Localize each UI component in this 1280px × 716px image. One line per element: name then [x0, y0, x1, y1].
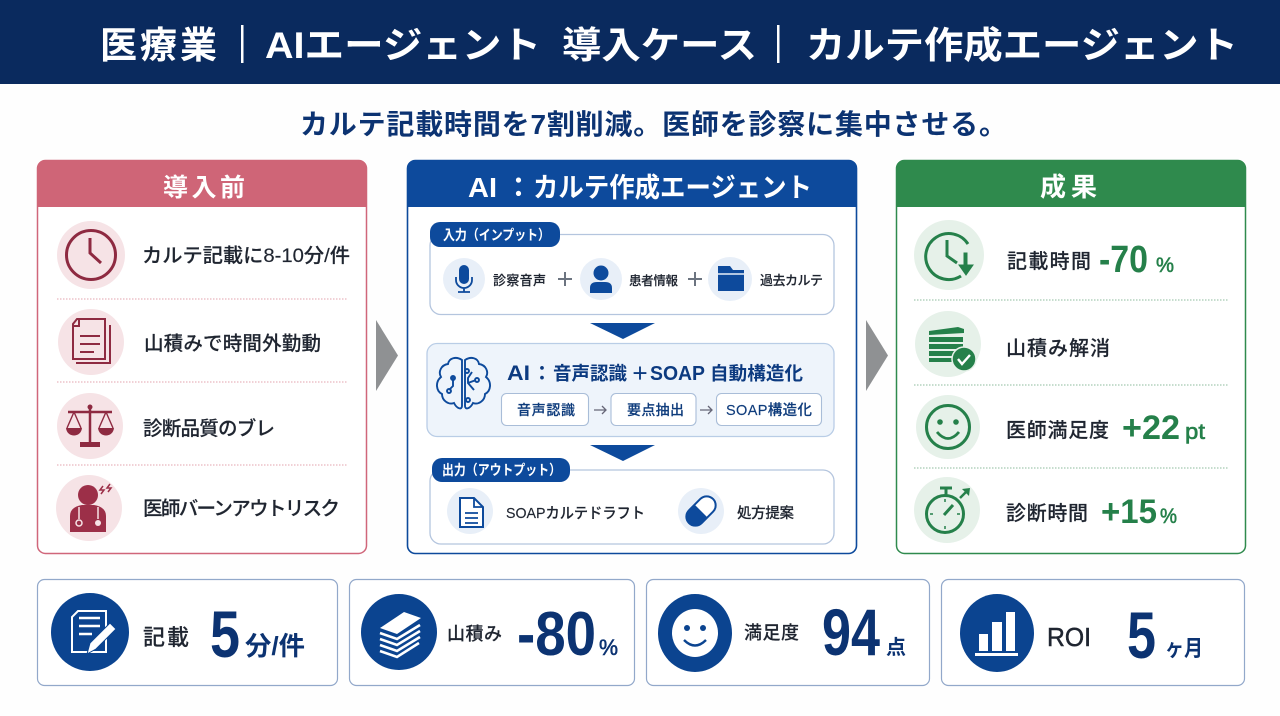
panel: results — [896, 160, 1246, 554]
icon: microphone — [443, 258, 485, 300]
panel heading: agent: カルテ作成エージェント — [533, 173, 812, 203]
metric: diagnosis time: +15 — [1101, 493, 1157, 531]
input pill: 入力（インプット） — [443, 227, 550, 243]
KPI card: satisfaction — [646, 580, 930, 686]
label: 記載 — [143, 625, 189, 650]
heading: AI process: 音声認識 — [553, 363, 627, 384]
KPI card: ROI — [942, 580, 1244, 686]
KPI card: backlog — [350, 580, 634, 686]
panel heading: results: 成果 — [1040, 172, 1097, 202]
icon: smile — [658, 594, 732, 672]
value: ヶ月 — [1165, 636, 1203, 661]
arrow: step one to two — [594, 406, 606, 414]
value: 5 — [210, 597, 240, 671]
heading: AI process: AI — [507, 362, 530, 385]
step: key point extraction — [611, 394, 696, 426]
metric: doctor satisfaction: 医師満足度 — [1006, 419, 1109, 442]
step: speech recognition: 音声認識 — [517, 402, 575, 418]
metric: documentation time — [1007, 239, 1174, 281]
heading: AI process: ： — [532, 363, 552, 385]
panel heading: before: 導入前 — [163, 174, 245, 202]
plus sign — [558, 272, 572, 286]
text: past records: 過去カルテ — [760, 273, 823, 288]
icon: burnt-out doctor — [56, 475, 122, 541]
panel heading: results — [896, 160, 1246, 207]
text: SOAP draft: SOAPカルテドラフト — [506, 505, 645, 522]
value: 点 — [886, 636, 906, 659]
icon: document — [447, 488, 493, 534]
step: key point extraction: 要点抽出 — [627, 402, 684, 418]
icon: note and pen — [51, 593, 129, 671]
heading: AI process — [507, 362, 803, 385]
output pill — [432, 458, 570, 482]
arrow: AI to output — [590, 445, 655, 461]
heading: AI process: ＋ — [631, 364, 649, 384]
metric: documentation time: -70 — [1099, 239, 1148, 281]
step: speech recognition — [502, 394, 588, 426]
text: diagnosis quality: 診断品質のブレ — [143, 417, 275, 440]
AI process group — [427, 344, 834, 436]
label: ROI — [1047, 622, 1091, 652]
arrow: agent to results — [866, 320, 888, 391]
output pill: 出力（アウトプット） — [442, 462, 561, 478]
icon: clock — [57, 221, 125, 289]
text: prescription proposal: 処方提案 — [737, 505, 794, 522]
text: documentation time: カルテ記載に8-10分/件 — [142, 245, 350, 267]
panel heading: agent — [407, 160, 857, 207]
value: % — [599, 635, 618, 660]
text: burnout risk: 医師バーンアウトリスク — [143, 498, 340, 520]
text: consultation audio: 診察音声 — [493, 273, 546, 288]
arrow: input to AI — [590, 323, 655, 339]
panel: AI agent — [407, 160, 857, 554]
arrow: before to agent — [376, 320, 398, 391]
plus sign — [688, 272, 702, 286]
input pill — [430, 222, 560, 247]
icon: capsule — [678, 488, 724, 534]
metric: documentation time: 記載時間 — [1007, 250, 1091, 273]
metric: doctor satisfaction — [1006, 409, 1205, 447]
input group — [430, 222, 834, 314]
title banner: AIエージェント — [265, 25, 541, 66]
panel heading: before — [37, 160, 367, 207]
icon: bar chart — [960, 594, 1034, 672]
step: SOAP structuring: SOAP構造化 — [726, 401, 812, 419]
metric: documentation time: % — [1156, 254, 1174, 277]
text: overtime: 山積みで時間外勤動 — [144, 333, 321, 355]
panel: before introduction — [37, 160, 367, 554]
icon: folder — [708, 257, 752, 301]
icon: document stack — [58, 309, 124, 375]
value: 94 — [822, 595, 880, 669]
metric: doctor satisfaction: pt — [1185, 419, 1205, 444]
metric: diagnosis time — [1006, 493, 1177, 531]
icon: brain — [437, 358, 490, 408]
panel heading: agent: ： — [505, 173, 532, 203]
title banner: カルテ作成エージェント — [806, 25, 1238, 66]
title banner: 医療業 — [100, 25, 217, 66]
icon: scales — [57, 393, 123, 459]
icon: stopwatch — [914, 477, 980, 543]
KPI card: documentation — [38, 580, 338, 686]
value: -80 — [517, 600, 596, 669]
value — [210, 597, 305, 671]
value: 5 — [1127, 598, 1156, 672]
metric: backlog cleared: 山積み解消 — [1006, 337, 1110, 360]
value — [1127, 598, 1203, 672]
panel heading: agent: AI — [468, 172, 497, 203]
heading: AI process: SOAP — [650, 363, 705, 385]
icon: clock down — [914, 220, 984, 290]
title banner — [0, 0, 1280, 84]
value: 分/件 — [245, 631, 305, 661]
step: SOAP structuring — [716, 394, 822, 426]
heading: AI process: 自動構造化 — [710, 363, 803, 384]
icon: smile — [916, 395, 980, 459]
icon: paper stack — [361, 594, 437, 670]
label: 山積み — [447, 624, 502, 644]
label: 満足度 — [744, 623, 799, 643]
metric: diagnosis time: 診断時間 — [1006, 502, 1088, 525]
icon: patient — [580, 258, 622, 300]
subtitle: カルテ記載時間を7割削減。医師を診察に集中させる。 — [300, 109, 1007, 140]
output group — [430, 458, 834, 544]
arrow: step two to three — [700, 406, 712, 414]
metric: diagnosis time: % — [1160, 505, 1177, 528]
text: patient info: 患者情報 — [629, 273, 678, 288]
metric: doctor satisfaction: +22 — [1122, 409, 1180, 447]
icon: cleared backlog — [915, 311, 981, 377]
title banner: 導入ケース — [562, 25, 757, 66]
